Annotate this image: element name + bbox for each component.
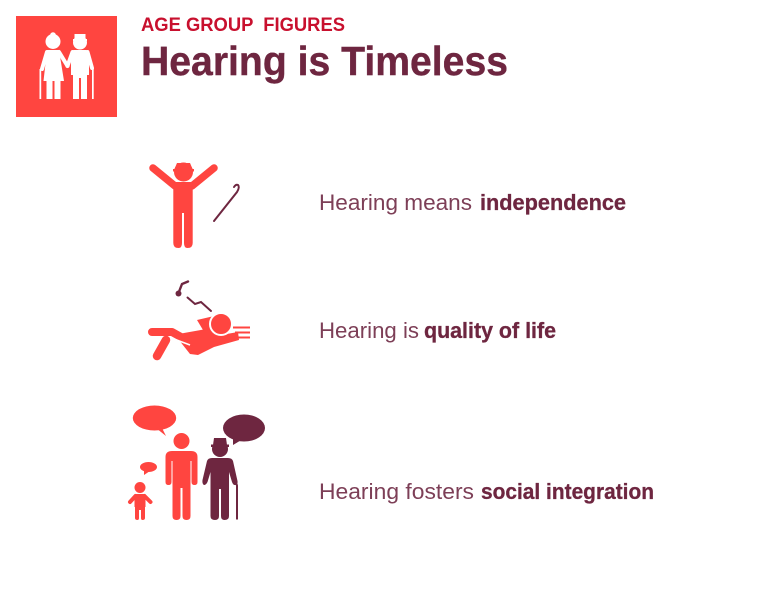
text: independence: Hearing means xyxy=(319,190,472,215)
icon: child, adult and elder with speech bubbles xyxy=(130,406,265,520)
icon: person lying down listening to music xyxy=(152,282,250,356)
text: independence xyxy=(319,190,626,215)
text: quality of life: Hearing is xyxy=(319,318,419,343)
icon: person with arms raised and discarded cane xyxy=(153,162,239,248)
icon: elderly couple badge xyxy=(16,16,117,117)
text: independence: independence xyxy=(480,190,626,215)
title: Hearing is Timeless xyxy=(141,38,508,84)
text: social integration: social integration xyxy=(481,479,654,504)
text: social integration xyxy=(319,479,654,504)
text: social integration: Hearing fosters xyxy=(319,479,474,504)
text: quality of life xyxy=(319,318,556,343)
text: quality of life: quality of life xyxy=(424,318,556,343)
subtitle: AGE GROUP FIGURES xyxy=(141,15,345,36)
